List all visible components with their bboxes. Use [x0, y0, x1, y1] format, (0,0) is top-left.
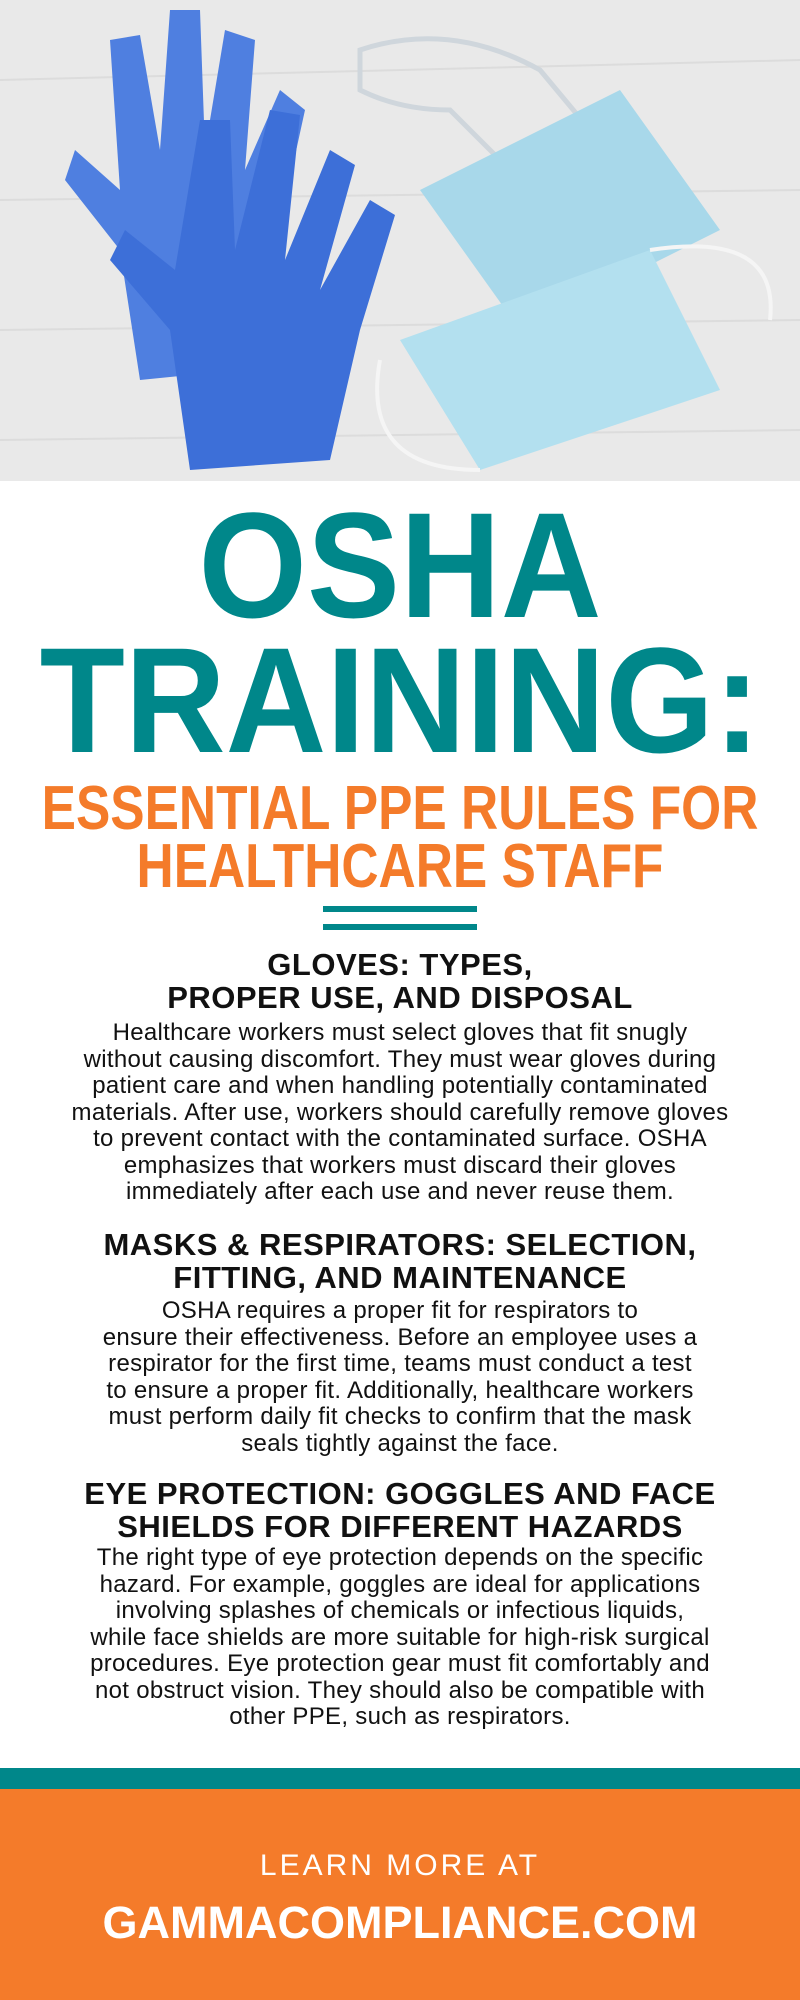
- footer: LEARN MORE AT: [260, 1849, 540, 1882]
- divider: [323, 906, 477, 930]
- heading: eye protection: [84, 1476, 716, 1544]
- text: eye protection: procedures. Eye protection gear must fit comfortably and: [90, 1650, 710, 1677]
- text: masks: must perform daily fit checks to confirm that the mask: [108, 1403, 692, 1430]
- text: gloves: immediately after each use and never reuse them.: [126, 1178, 674, 1205]
- text: gloves: patient care and when handling potentially contaminated: [92, 1072, 708, 1099]
- text: eye protection: [90, 1544, 710, 1730]
- masks: [420, 90, 720, 330]
- heading: masks: FITTING, AND MAINTENANCE: [173, 1260, 627, 1295]
- text: eye protection: hazard. For example, goggles are ideal for applications: [100, 1570, 700, 1598]
- subtitle: [42, 774, 758, 901]
- heading: gloves: [167, 947, 633, 1015]
- heading: gloves: GLOVES: TYPES,: [267, 947, 533, 982]
- text: masks: to ensure a proper fit. Additionally, healthcare workers: [106, 1376, 694, 1404]
- text: eye protection: The right type of eye protection depends on the specific: [97, 1544, 703, 1571]
- text: masks: ensure their effectiveness. Before an employee uses a: [103, 1324, 697, 1350]
- subtitle: ESSENTIAL PPE RULES FOR: [42, 774, 758, 843]
- text: gloves: to prevent contact with the contaminated surface. OSHA: [93, 1125, 707, 1152]
- text: eye protection: involving splashes of chemicals or infectious liquids,: [116, 1597, 684, 1624]
- text: eye protection: while face shields are more suitable for high-risk surgical: [90, 1624, 710, 1650]
- heading: eye protection: SHIELDS FOR DIFFERENT HAZARDS: [117, 1509, 683, 1544]
- text: gloves: without causing discomfort. They must wear gloves during: [84, 1046, 716, 1072]
- text: gloves: Healthcare workers must select gloves that fit snugly: [113, 1019, 687, 1046]
- text: masks: OSHA requires a proper fit for respirators to: [162, 1297, 638, 1324]
- text: masks: respirator for the first time, teams must conduct a test: [108, 1350, 692, 1377]
- text: TRAINING:: [40, 616, 760, 784]
- text: masks: [103, 1297, 697, 1456]
- title: OSHA: [198, 481, 602, 649]
- text: gloves: [72, 1019, 728, 1205]
- footer: GAMMACOMPLIANCE.COM: [103, 1897, 697, 1948]
- subtitle: HEALTHCARE STAFF: [137, 832, 663, 901]
- glove 1: [65, 10, 305, 380]
- heading: gloves: PROPER USE, AND DISPOSAL: [167, 980, 633, 1015]
- teal band: [0, 1768, 800, 1789]
- text: eye protection: other PPE, such as respirators.: [229, 1703, 571, 1730]
- text: masks: seals tightly against the face.: [241, 1430, 559, 1456]
- text: eye protection: not obstruct vision. They should also be compatible with: [95, 1676, 705, 1704]
- footer: [0, 1789, 800, 2000]
- text: gloves: materials. After use, workers should carefully remove gloves: [72, 1098, 728, 1126]
- glove 2: [110, 110, 395, 470]
- heading: masks: MASKS & RESPIRATORS: SELECTION,: [103, 1227, 697, 1262]
- heading: masks: [103, 1227, 697, 1295]
- goggles: [360, 39, 590, 166]
- text: gloves: emphasizes that workers must discard their gloves: [124, 1152, 676, 1178]
- photo: gloves, goggles and masks: [0, 0, 800, 481]
- heading: eye protection: EYE PROTECTION: GOGGLES AND FACE: [84, 1476, 716, 1511]
